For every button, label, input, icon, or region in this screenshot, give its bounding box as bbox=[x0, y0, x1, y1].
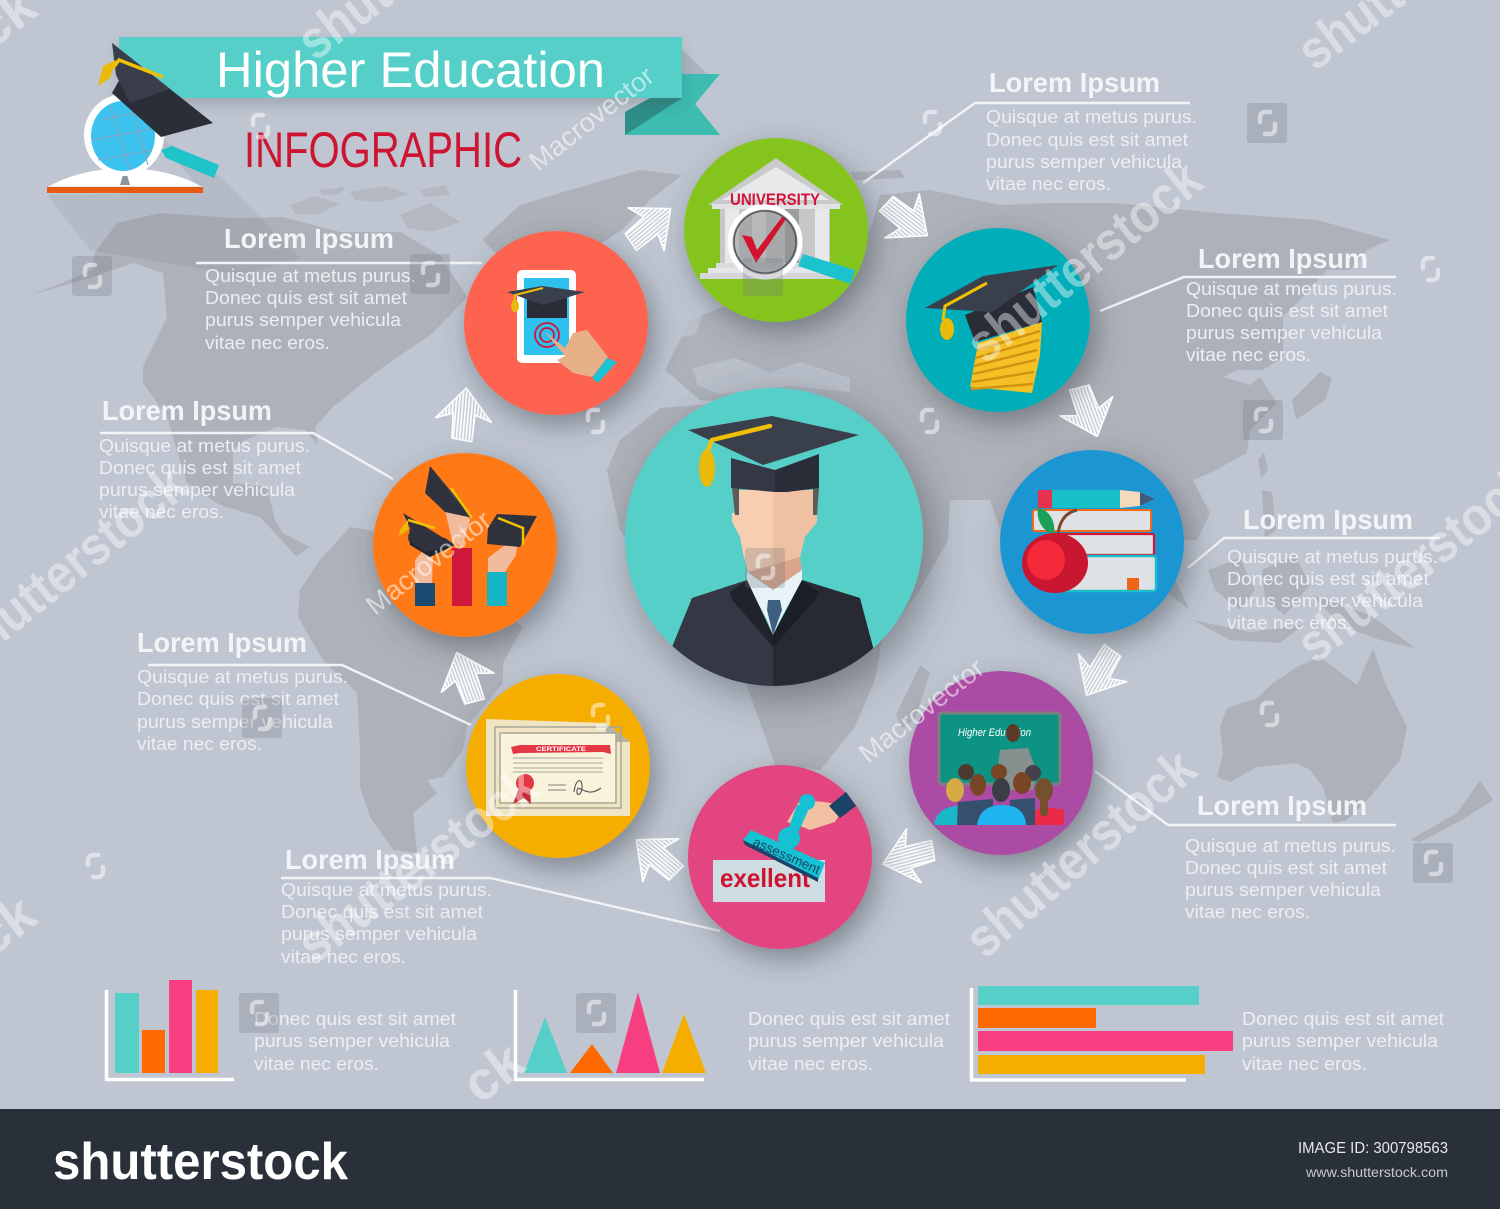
arrow: yellow to orange bbox=[430, 643, 501, 712]
header badge long shadow bbox=[47, 130, 300, 275]
cap bbox=[731, 458, 775, 492]
text: left top: purus semper vehicula bbox=[205, 309, 402, 330]
text: left upper: Lorem Ipsum bbox=[102, 395, 272, 426]
text: left lower: Quisque at metus purus. bbox=[281, 879, 492, 900]
text: top right: Lorem Ipsum bbox=[989, 67, 1160, 98]
ribbon shadow bbox=[682, 50, 708, 74]
world map bbox=[30, 170, 1493, 853]
icon: thrown caps bbox=[399, 466, 537, 557]
text: left upper: Donec quis est sit amet bbox=[99, 457, 301, 478]
hatched arrows bbox=[430, 181, 1137, 895]
text: left top bbox=[205, 223, 416, 353]
text: right lower: Quisque at metus purus. bbox=[1185, 835, 1396, 856]
text: right lower: vitae nec eros. bbox=[1185, 901, 1310, 922]
footer url: www.shutterstock.com bbox=[1305, 1164, 1448, 1180]
text: top right: vitae nec eros. bbox=[986, 173, 1111, 194]
watermark tiles bbox=[72, 103, 1453, 1033]
watermarks: Macrovector bbox=[360, 505, 497, 621]
ribbon band bbox=[119, 37, 682, 98]
icon: bars bbox=[415, 548, 507, 606]
panel: books and apple circle bbox=[1000, 450, 1184, 634]
icon: book stack bbox=[1033, 510, 1156, 591]
panel: assessment circle bbox=[688, 765, 872, 949]
title ribbon bbox=[119, 37, 720, 135]
text: right middle: vitae nec eros. bbox=[1227, 612, 1352, 633]
text: left upper: Quisque at metus purus. bbox=[99, 435, 310, 456]
arrow: purple to pink bbox=[876, 823, 941, 891]
icon: certificate bbox=[486, 719, 630, 816]
text: horizontal bar chart caption: vitae nec eros. bbox=[1242, 1053, 1367, 1074]
text: horizontal bar chart caption bbox=[1242, 1008, 1444, 1074]
seas bbox=[672, 280, 850, 394]
text: left lower: vitae nec eros. bbox=[281, 946, 406, 967]
text: right lower bbox=[1185, 790, 1396, 922]
text: bar chart caption: vitae nec eros. bbox=[254, 1053, 379, 1074]
icon: graduate bbox=[672, 416, 874, 686]
text: right middle: purus semper vehicula bbox=[1227, 590, 1424, 611]
text: left lower: purus semper vehicula bbox=[281, 923, 478, 944]
text: triangle chart caption bbox=[748, 1008, 950, 1074]
text: bar chart caption bbox=[254, 1008, 456, 1074]
icon: apple bbox=[1022, 508, 1088, 593]
ribbon fold bbox=[625, 98, 682, 135]
arrow: teal to blue bbox=[1053, 377, 1124, 446]
watermark bracket marks bbox=[85, 112, 1441, 1024]
icon: coin stack bbox=[970, 322, 1042, 393]
footer bbox=[0, 1109, 1500, 1209]
arrow: orange to coral bbox=[434, 386, 494, 443]
text: right upper: Quisque at metus purus. bbox=[1186, 278, 1397, 299]
text: right upper: purus semper vehicula bbox=[1186, 322, 1383, 343]
triangle chart bbox=[516, 990, 706, 1080]
icon: students bbox=[934, 764, 1064, 825]
shirt bbox=[747, 570, 802, 635]
icon: pencil bbox=[1038, 490, 1155, 508]
arrow: pink to yellow bbox=[618, 818, 695, 895]
icon: teacher bbox=[997, 724, 1037, 790]
panel: graduate centre circle bbox=[625, 388, 923, 700]
text: top right: purus semper vehicula bbox=[986, 151, 1183, 172]
text: left top: Quisque at metus purus. bbox=[205, 265, 416, 286]
icon: cap on tablet bbox=[507, 286, 585, 318]
icon: hands bbox=[415, 505, 518, 583]
text: left middle: vitae nec eros. bbox=[137, 733, 262, 754]
text: left middle: Quisque at metus purus. bbox=[137, 666, 348, 687]
footer logo: shutterstock bbox=[53, 1133, 348, 1191]
panel: tablet circle bbox=[464, 231, 648, 415]
icon: chalkboard bbox=[939, 713, 1060, 784]
text: bar chart caption: Donec quis est sit amet bbox=[254, 1008, 456, 1029]
text: right middle bbox=[1227, 504, 1438, 633]
text: left lower: Lorem Ipsum bbox=[285, 844, 455, 875]
text: horizontal bar chart caption: Donec quis est sit amet bbox=[1242, 1008, 1444, 1029]
icon: university building bbox=[700, 158, 843, 279]
panel: classroom circle bbox=[909, 671, 1093, 855]
text: right middle: Lorem Ipsum bbox=[1243, 504, 1413, 535]
watermarks: ck bbox=[451, 1030, 536, 1115]
neck and face bbox=[732, 490, 773, 590]
icon: graduation cap bbox=[925, 265, 1058, 342]
gown bbox=[672, 580, 773, 686]
text: left top: Donec quis est sit amet bbox=[205, 287, 407, 308]
text: triangle chart caption: purus semper vehicula bbox=[748, 1030, 945, 1051]
text: left top: vitae nec eros. bbox=[205, 332, 330, 353]
text: right lower: Donec quis est sit amet bbox=[1185, 857, 1387, 878]
text: right middle: Donec quis est sit amet bbox=[1227, 568, 1429, 589]
text: top right bbox=[986, 67, 1197, 194]
text: right upper: Donec quis est sit amet bbox=[1186, 300, 1388, 321]
text: right upper bbox=[1186, 243, 1397, 365]
panel: raised caps circle bbox=[373, 453, 557, 637]
tassel bbox=[707, 426, 770, 453]
watermarks: Macrovector bbox=[523, 61, 660, 177]
icon: tablet bbox=[517, 270, 576, 363]
text: right lower: Lorem Ipsum bbox=[1197, 790, 1367, 821]
text: left upper bbox=[99, 395, 310, 522]
university label: UNIVERSITY bbox=[730, 190, 821, 209]
arrow: green to teal bbox=[868, 181, 945, 258]
lapels bbox=[730, 580, 773, 647]
text: right lower: purus semper vehicula bbox=[1185, 879, 1382, 900]
icon: globe, book and cap bbox=[47, 43, 219, 193]
icon: stamp and hand bbox=[743, 792, 856, 882]
icon: stamp and hand: assessment bbox=[751, 834, 823, 877]
text: left upper: vitae nec eros. bbox=[99, 501, 224, 522]
text: triangle chart caption: Donec quis est sit amet bbox=[748, 1008, 950, 1029]
text: top right: Quisque at metus purus. bbox=[986, 106, 1197, 127]
text: horizontal bar chart caption: purus semper vehicula bbox=[1242, 1030, 1439, 1051]
ribbon tail bbox=[625, 74, 720, 135]
text: left lower: Donec quis est sit amet bbox=[281, 901, 483, 922]
text: bar chart caption: purus semper vehicula bbox=[254, 1030, 451, 1051]
text: left middle: Donec quis est sit amet bbox=[137, 688, 339, 709]
panel: university circle bbox=[684, 138, 868, 322]
text: right middle: Quisque at metus purus. bbox=[1227, 546, 1438, 567]
icon: magnifier with check bbox=[730, 207, 855, 284]
panel: certificate circle bbox=[466, 674, 650, 858]
tie bbox=[767, 600, 782, 635]
exellent label: exellent bbox=[720, 863, 810, 893]
text: left upper: purus semper vehicula bbox=[99, 479, 296, 500]
text: triangle chart caption: vitae nec eros. bbox=[748, 1053, 873, 1074]
connector lines bbox=[100, 103, 1440, 931]
chalkboard text: Higher Education bbox=[958, 727, 1031, 739]
watermarks: shutterstock bbox=[955, 148, 1214, 374]
icon: certificate: CERTIFICATE bbox=[536, 746, 587, 753]
text: right upper: vitae nec eros. bbox=[1186, 344, 1311, 365]
subtitle: INFOGRAPHIC bbox=[244, 122, 522, 178]
hair bbox=[732, 488, 819, 515]
horizontal bar chart bbox=[972, 986, 1233, 1080]
panel: cap and coins circle bbox=[906, 228, 1090, 412]
text: left lower bbox=[281, 844, 492, 967]
paper bbox=[713, 860, 825, 902]
icon: hand bbox=[545, 330, 617, 383]
watermarks: Macrovector bbox=[853, 653, 990, 769]
text: right upper: Lorem Ipsum bbox=[1198, 243, 1368, 274]
text: left middle bbox=[137, 627, 348, 754]
watermarks: shutterstock bbox=[954, 737, 1208, 969]
bar chart bbox=[106, 980, 234, 1080]
arrow: blue to purple bbox=[1062, 635, 1137, 709]
arrow: coral to green bbox=[612, 187, 689, 264]
image id: IMAGE ID: 300798563 bbox=[1298, 1140, 1448, 1157]
watermarks: shutterstock bbox=[286, 755, 550, 975]
text: left middle: Lorem Ipsum bbox=[137, 627, 307, 658]
title: Higher Education bbox=[216, 42, 605, 98]
text: top right: Donec quis est sit amet bbox=[986, 129, 1188, 150]
text: left middle: purus semper vehicula bbox=[137, 711, 334, 732]
text: left top: Lorem Ipsum bbox=[224, 223, 394, 254]
